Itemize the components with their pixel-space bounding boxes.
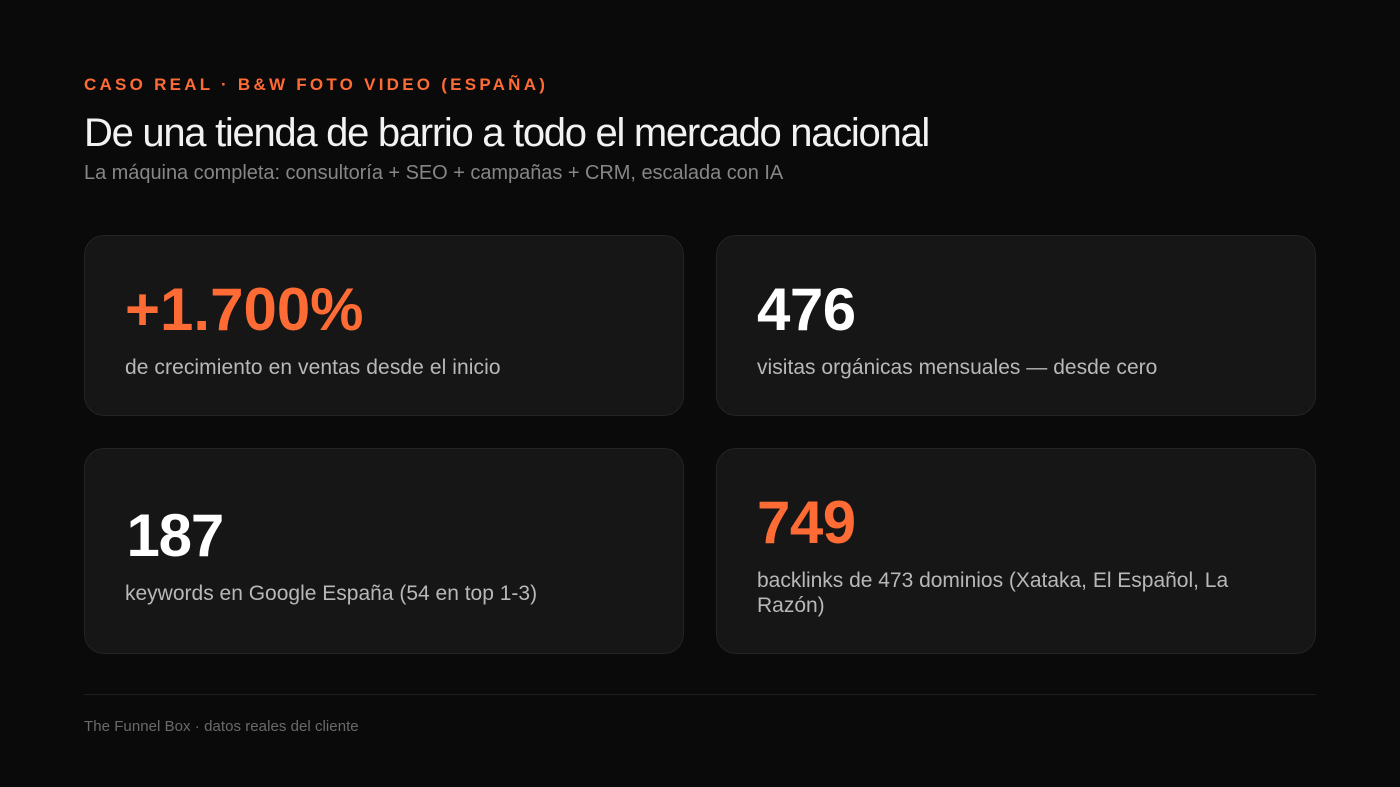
label: organic visits: visitas orgánicas mensuales — desde cero xyxy=(757,356,1157,379)
stat: 749: 749 xyxy=(757,489,856,556)
subtitle: La máquina completa: consultoría + SEO + campañas + CRM, escalada con IA xyxy=(84,162,783,184)
footer divider xyxy=(84,694,1316,695)
label: backlinks xyxy=(757,569,1228,617)
stat: +1.700%: +1.700% xyxy=(125,276,364,343)
label: sales growth: de crecimiento en ventas desde el inicio xyxy=(125,356,501,379)
stat: 476: 476 xyxy=(757,276,856,343)
label: backlinks: backlinks de 473 dominios (Xataka, El Español, La xyxy=(757,569,1228,592)
label: keywords: keywords en Google España (54 en top 1-3) xyxy=(125,582,537,605)
panel: sales growth xyxy=(84,235,684,416)
eyebrow label: CASO REAL · B&W FOTO VIDEO (ESPAÑA) xyxy=(84,75,548,94)
panel: keywords xyxy=(84,448,684,654)
panel: backlinks xyxy=(716,448,1316,654)
label: backlinks: Razón) xyxy=(757,594,825,617)
stat: 187: 187 xyxy=(126,502,223,569)
title: De una tienda de barrio a todo el mercado nacional xyxy=(84,111,929,155)
panel: organic visits xyxy=(716,235,1316,416)
footer note: The Funnel Box · datos reales del cliente xyxy=(84,718,359,735)
